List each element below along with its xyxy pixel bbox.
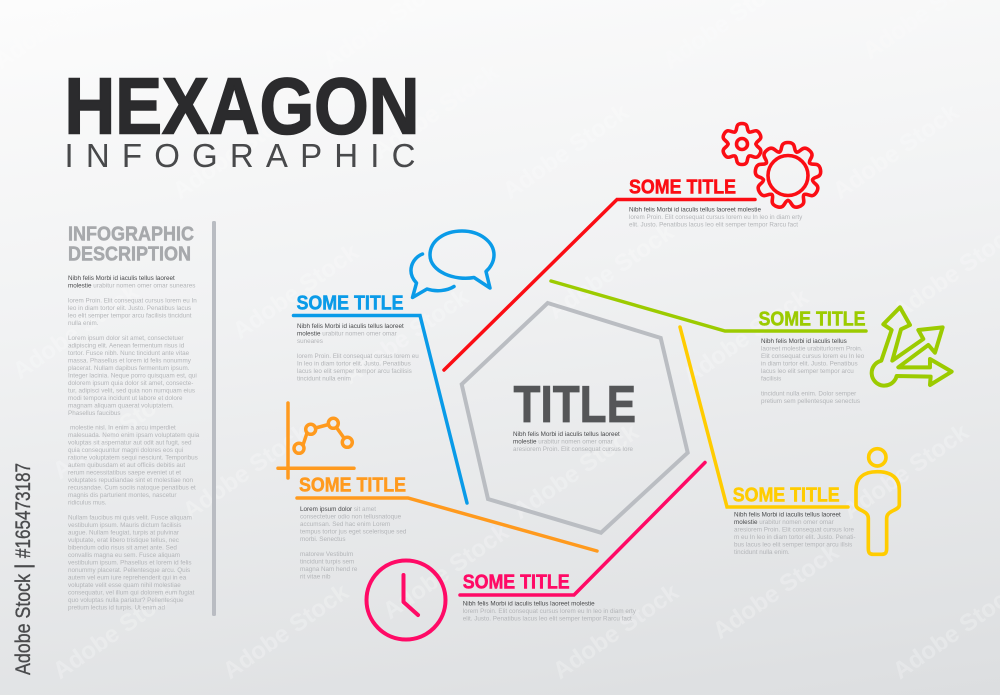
watermarks: Adobe Stock: [178, 418, 314, 525]
description text: lorem Proin. Elit consequat cursus lorem eu In: [68, 298, 197, 304]
icon: clock: [366, 560, 446, 640]
orange text: rit vitae nib: [300, 574, 331, 581]
yellow text: urabitur nomen omer omar: [757, 519, 834, 526]
yellow connector: [680, 327, 848, 507]
description text: ratione voluptatem sequi nesciunt. Temporibus: [68, 455, 198, 462]
orange text: tempus tortor jus eget scelerisque sed: [300, 528, 407, 536]
description heading: INFOGRAPHIC: [68, 224, 194, 246]
description text: vulputate, erat libero tristique tellus, nec: [68, 537, 179, 544]
description text: Integer lacinia. Neque porro quisquam est, qui: [68, 372, 197, 380]
description text: consequatur, vel illum qui dolorem eum fugiat: [68, 590, 195, 597]
description text: autem vel eum iure reprehenderit qui in ea: [68, 575, 187, 582]
green heading: SOME TITLE: [758, 309, 866, 331]
green text: pretium sem pellentesque senectus: [761, 398, 860, 405]
icon: person: [856, 449, 899, 554]
stock id: Adobe Stock: [12, 574, 35, 675]
orange text: consectetuer odio non tellusnatoque: [300, 514, 402, 520]
red text: lorem Proin. Elit consequat cursus lorem eu In leo in diam erty: [629, 214, 803, 221]
pink connector: [460, 462, 705, 595]
orange text: tincidunt turpis sem: [300, 559, 354, 566]
watermarks: Adobe Stock: [828, 98, 964, 205]
icon: gears: [721, 124, 822, 209]
description text: adipiscing elit. Aenean fermentum risus id: [68, 342, 185, 350]
hexagon text: urabitur nomen omer omar: [536, 438, 613, 446]
blue text: molestie: [297, 331, 321, 338]
pink text: lorem Proin. Elit consequat cursus lorem eu In leo in diam erty: [463, 608, 637, 615]
yellow text: tincidunt nulla enim.: [734, 549, 790, 556]
icon: speech bubbles: [411, 231, 494, 298]
description text: nulla enim.: [68, 320, 99, 327]
description text: Lorem ipsum dolor sit amet, consectetuer: [68, 335, 184, 342]
green text: tincidunt nulla enim. Dolor semper: [761, 390, 856, 398]
watermarks: Adobe Stock: [368, 58, 504, 165]
green text: lacus leo elit semper tempor arcu: [761, 368, 854, 375]
blue text: suneares: [297, 338, 323, 345]
description text: voluptates repudiandae sint et molestiae non: [68, 477, 193, 484]
green text: Nibh felis Morbi id iaculis tellus: [761, 338, 847, 345]
description text: vestibulum ipsum. Phasellus et lorem id felis: [68, 560, 192, 567]
watermarks: Adobe Stock: [378, 518, 514, 625]
description text: malesuada. Nemo enim ipsam voluptatem quia: [68, 432, 200, 439]
orange text: accumsan. Sed hac enim Lorem: [300, 521, 390, 528]
stock id: #165473187: [12, 463, 35, 558]
orange text: morbi. Senectus: [300, 536, 346, 543]
blue text: urabitur nomen omer omar: [320, 331, 397, 338]
description text: recusandae. Cum sociis natoque penatibus et: [68, 485, 196, 492]
watermarks: Adobe Stock: [48, 378, 184, 485]
watermarks: Adobe Stock: [168, 98, 304, 205]
green text: facilisis: [761, 376, 781, 382]
yellow text: molestie: [734, 519, 758, 526]
watermarks: Adobe Stock: [708, 538, 844, 645]
orange text: matorew Vestibulm: [300, 551, 353, 558]
panel: green section: [551, 281, 952, 405]
pink heading: SOME TITLE: [463, 571, 570, 593]
hexagon text: molestie: [513, 438, 537, 446]
blue text: In leo in diam tortor elit. Justo. Penatibus: [297, 360, 411, 368]
hexagon text: aresiorem Proin. Elit consequat cursus lore: [513, 446, 634, 453]
description text: pretium lectus id turpis. Ut enim ad: [68, 605, 165, 612]
description text: molestie: [68, 282, 92, 290]
watermarks: Adobe Stock: [548, 578, 684, 685]
description text: Nullam faucibus mi quis velit. Fusce aliquam: [68, 515, 192, 522]
watermarks: Adobe Stock: [838, 418, 974, 525]
orange text: magna Nam hend re: [300, 566, 358, 573]
green text: laoreet molestie urabiturlorem Proin.: [761, 346, 863, 352]
panel: pink section: [366, 462, 705, 640]
blue text: Nibh felis Morbi id iaculis tellus laoreet: [297, 323, 404, 330]
panel: red section: [444, 124, 822, 370]
description text: voluptate velit esse quam nihil molestiae: [68, 582, 181, 589]
description text: leo elit semper tempor arcu facilisis tincidunt: [68, 312, 192, 320]
panel: description: [68, 221, 216, 616]
panel: central hexagon: [462, 303, 688, 533]
pink text: elit. Justo. Penatibus lacus leo elit semper tempor Rarcu fact: [463, 616, 632, 622]
description text: rerum necessitatibus saepe eveniet ut et: [68, 470, 181, 477]
description text: convallis magna eu sem. Fusce aliquam: [68, 552, 180, 559]
blue text: lacus leo elit semper tempor arcu facilisis: [297, 368, 412, 375]
yellow text: bus lacus leo elit semper tempor arcu illsis: [734, 542, 852, 548]
orange connector: [297, 498, 597, 551]
description text: leo in diam tortor elit. Justo. Penatibus lacus: [68, 305, 191, 312]
main title: INFOGRAPHIC: [64, 137, 416, 174]
blue connector: [294, 316, 467, 503]
description text: Phasellus faucibus: [68, 410, 121, 417]
stock id: |: [12, 564, 35, 569]
yellow heading: SOME TITLE: [733, 485, 840, 507]
description text: massa. Phasellus et lorem id felis nonummy: [68, 358, 192, 364]
green text: Elit consequat cursus lorem eu In leo: [761, 353, 865, 360]
description text: urabitur nomen omer omar suneares: [91, 282, 195, 290]
watermarks: Adobe Stock: [228, 238, 364, 345]
description text: modi tempora incidunt ut labore et dolore: [68, 395, 183, 402]
hexagon outline: [462, 303, 688, 533]
red text: elit. Justo. Penatibus lacus leo elit semper tempor Rarcu fact: [629, 222, 798, 228]
description text: molestie nisl. In enim a arcu imperdiet: [70, 425, 176, 432]
red heading: SOME TITLE: [629, 176, 736, 198]
icon: branching arrows: [872, 307, 952, 386]
blue text: lorem Proin. Elit consequat cursus lorem eu: [297, 353, 419, 360]
watermarks: Adobe Stock: [678, 283, 814, 390]
hexagon title: TITLE: [514, 376, 636, 434]
panel: blue section: [294, 231, 494, 503]
red connector: [444, 200, 755, 370]
green text: in diam tortor elit. Justo. Penatibus: [761, 360, 858, 368]
red text: Nibh felis Morbi id iaculis tellus laoreet molestie: [629, 206, 761, 214]
watermarks: Adobe Stock: [508, 418, 644, 525]
blue heading: SOME TITLE: [296, 292, 404, 314]
description text: quia consequuntur magni dolores eos qui: [68, 447, 183, 454]
description text: voluptas sit aspernatur aut odit aut fugit, sed: [68, 440, 192, 447]
yellow text: m eu In leo in diam tortor elit. Justo. Penati-: [734, 534, 855, 541]
icon: line chart: [278, 403, 354, 478]
description text: tur, adipisci velit, sed quia non numquam eius: [68, 388, 195, 394]
yellow text: Nibh felis Morbi id iaculis tellus laoreet: [734, 512, 841, 518]
orange text: Lorem ipsum dolor: [300, 506, 352, 513]
green connector: [551, 281, 866, 331]
description text: placerat. Nullam dapibus fermentum ipsum.: [68, 365, 190, 372]
description text: augue. Nullam feugiat, turpis at pulvinar: [68, 530, 179, 537]
description text: magnis dis parturient montes, nascetur: [68, 492, 176, 499]
description side bar: [212, 221, 216, 616]
panel: yellow section: [680, 327, 899, 556]
description text: Nibh felis Morbi id iaculis tellus laoreet: [68, 275, 175, 282]
description heading: DESCRIPTION: [68, 244, 191, 266]
description text: nonummy placerat. Pellentesque arcu. Quis: [68, 567, 190, 574]
pink text: Nibh felis Morbi id iaculis tellus laoreet molestie: [463, 600, 595, 608]
blue text: tincidunt nulla enim: [297, 376, 351, 382]
yellow text: aresiorem Proin. Elit consequat cursus lore: [734, 526, 855, 534]
description text: quo voluptas nulla pariatur? Pellentesque: [68, 597, 184, 604]
hexagon text: Nibh felis Morbi id iaculis tellus laoreet: [513, 431, 620, 438]
main title: HEXAGON: [64, 62, 420, 150]
description heading: [68, 224, 194, 266]
description text: dolorem ipsum quia dolor sit amet, consecte-: [68, 380, 193, 387]
watermarks: Adobe Stock: [338, 283, 474, 390]
watermarks: Adobe Stock: [498, 98, 634, 205]
description text: magnam aliquam quaerat voluptatem.: [68, 402, 174, 410]
stock id: [12, 463, 35, 675]
orange heading: SOME TITLE: [299, 475, 406, 497]
panel: orange section: [278, 403, 597, 581]
watermarks: Adobe Stock: [48, 578, 184, 685]
description text: autem quibusdam et aut officiis debitis aut: [68, 462, 185, 469]
description text: bibendum odio risus sit amet ante. Sed: [68, 545, 177, 552]
description text: ridiculus mus.: [68, 500, 107, 507]
watermarks: Adobe Stock: [543, 218, 679, 325]
orange text: sit amet: [352, 506, 376, 513]
description text: vestibulum ipsum. Mauris dictum facilisis: [68, 522, 181, 529]
watermarks: Adobe Stock: [218, 578, 354, 685]
description text: tortor. Fusce nibh. Nunc tincidunt ante vitae: [68, 350, 190, 357]
watermarks: Adobe Stock: [8, 278, 144, 385]
